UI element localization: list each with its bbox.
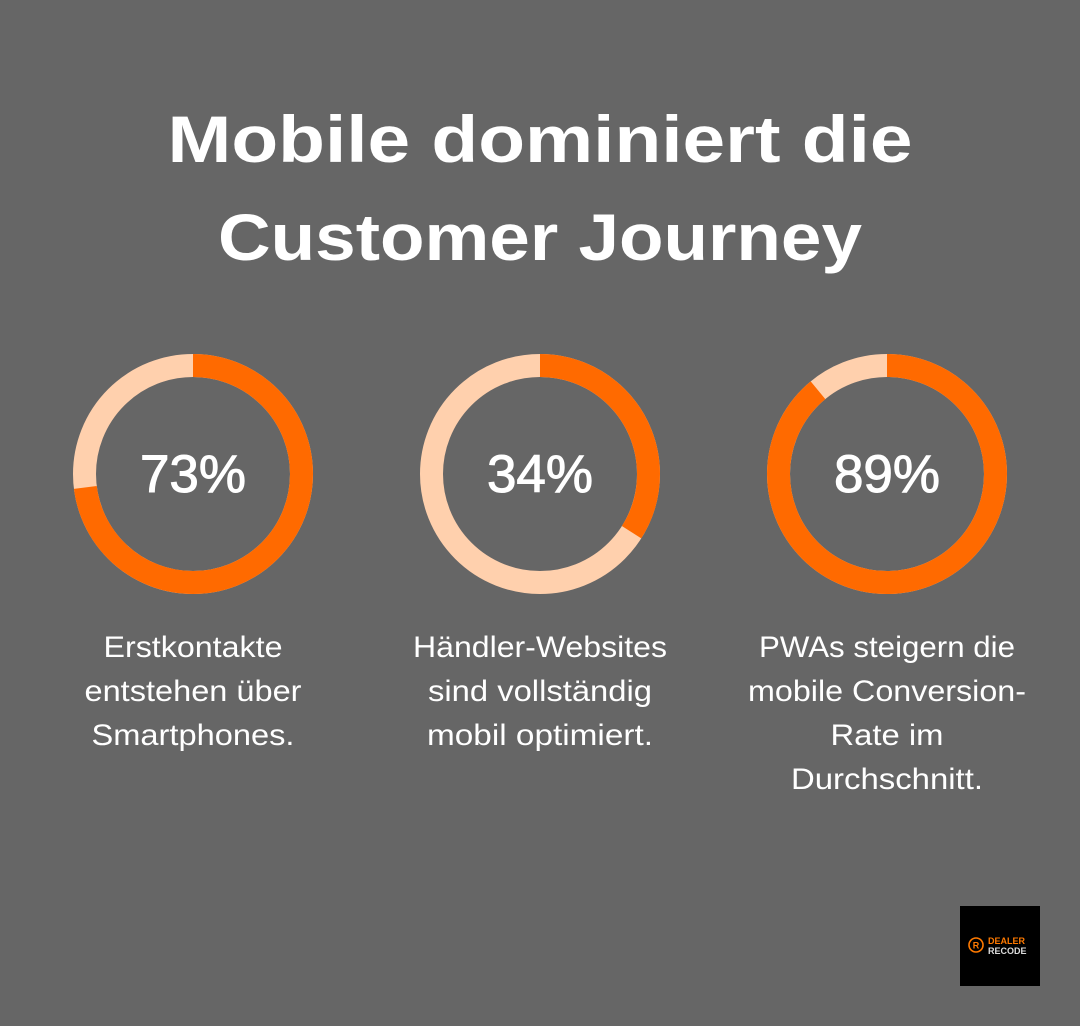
text: caption 2: Händler-Websites [413,631,667,664]
text: caption 3 [748,631,1026,796]
title [168,102,912,274]
text: caption 2: sind vollständig [428,675,652,708]
text: caption 2 [413,631,667,752]
logo: Dealer Recode: R [973,940,980,950]
text: caption 1: Smartphones. [92,719,294,752]
text: caption 3: mobile Conversion- [748,675,1026,708]
panel: stat 89% [748,366,1026,796]
logo: Dealer Recode: RECODE [988,946,1027,956]
text: caption 3: Durchschnitt. [791,763,983,796]
chart: donut 73% [84,366,302,582]
number: 89%: 89% [834,445,940,504]
number: 73%: 73% [140,445,246,504]
title: Customer Journey [218,200,862,274]
chart: donut 89% [778,366,996,582]
panel: stat 73% [84,366,302,752]
number: 34%: 34% [487,445,593,504]
logo: Dealer Recode [960,906,1040,986]
text: caption 1 [84,631,302,752]
chart: donut 34% [432,366,648,582]
panel: stat 34% [413,366,667,752]
text: caption 3: PWAs steigern die [759,631,1015,664]
text: caption 2: mobil optimiert. [427,719,653,752]
title: Mobile dominiert die [168,102,912,176]
text: caption 1: entstehen über [84,675,302,708]
text: caption 1: Erstkontakte [104,631,282,664]
text: caption 3: Rate im [830,719,944,752]
logo: Dealer Recode: DEALER [988,936,1026,946]
